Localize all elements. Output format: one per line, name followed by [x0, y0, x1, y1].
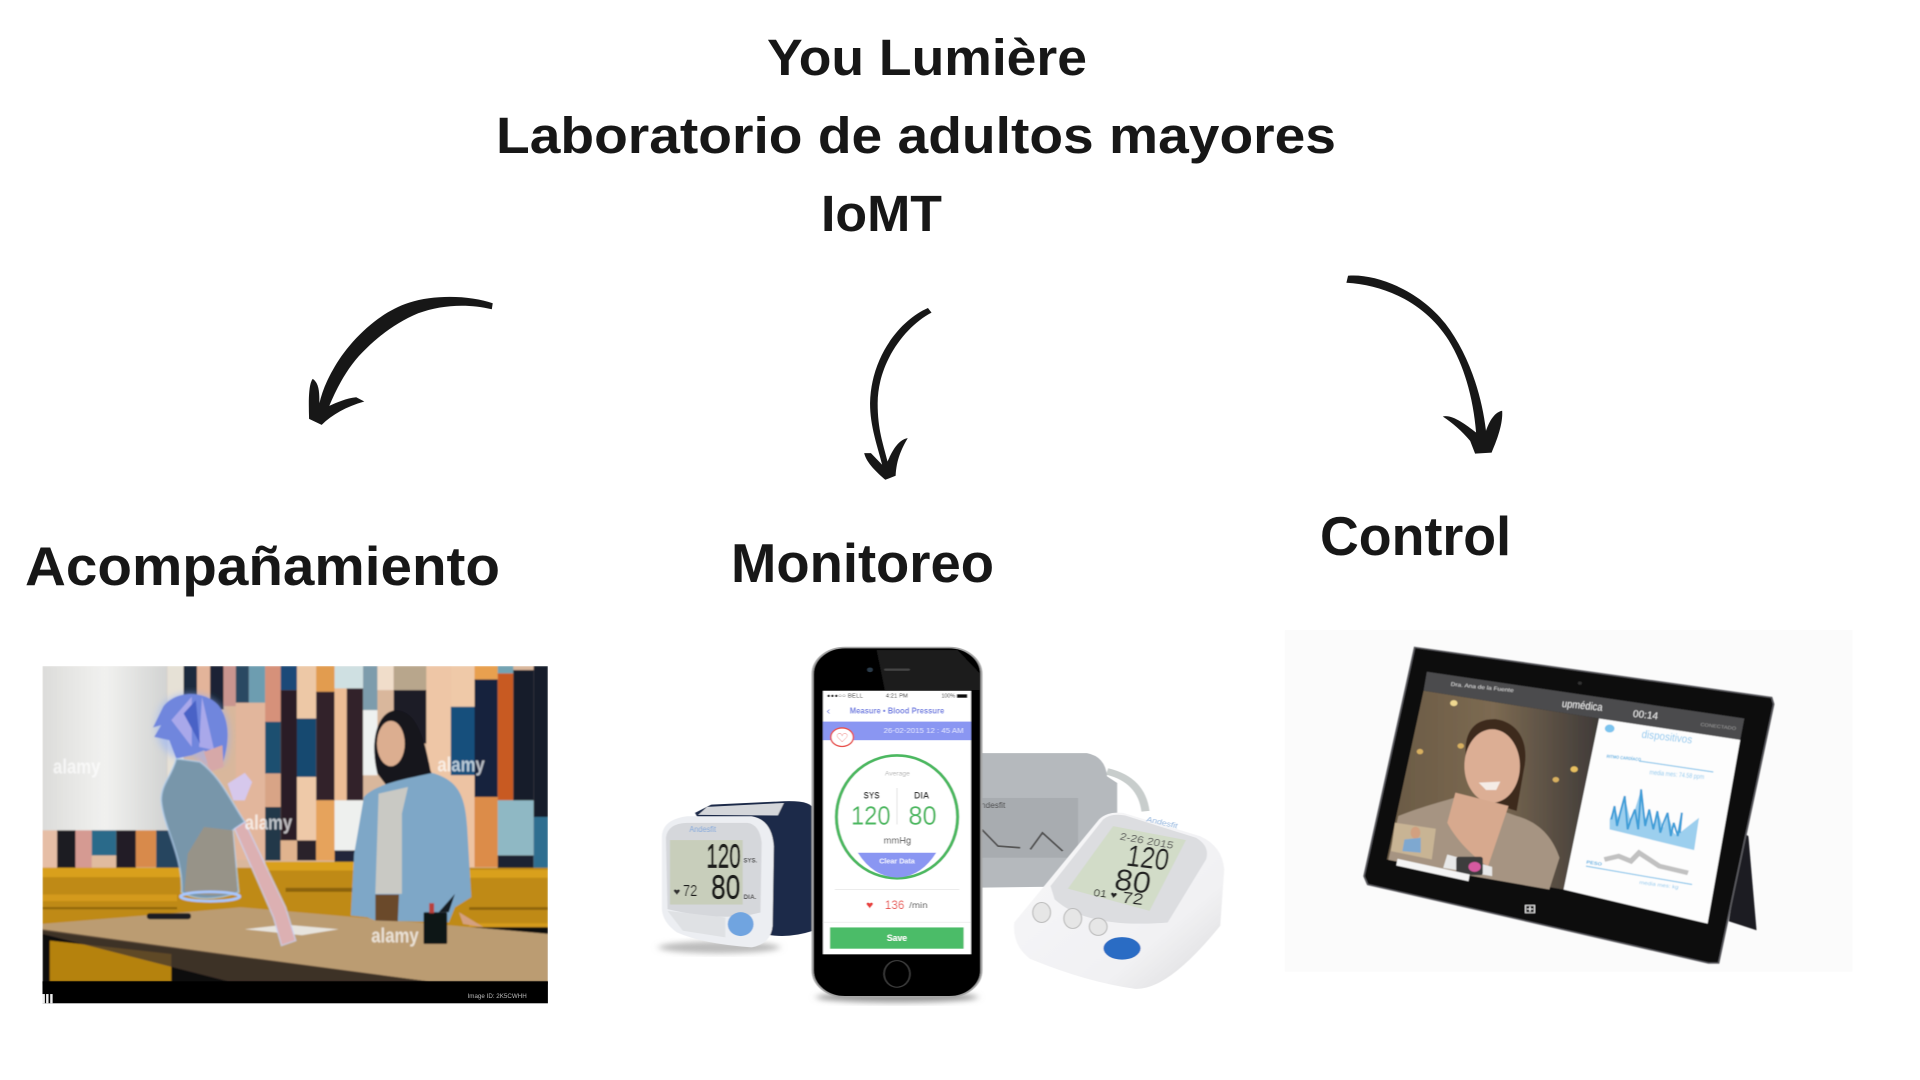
desktop monitor: 120	[1124, 840, 1172, 877]
photo: tablet telemedicine	[1285, 630, 1852, 972]
phone: /min	[909, 901, 928, 910]
dispositivos panel: dispositivos	[1641, 728, 1693, 746]
arm cuff	[981, 753, 1145, 888]
yellow wainscoting	[42, 862, 548, 938]
dispositivos panel: media mes: kg	[1639, 880, 1679, 891]
photo: tablet telemedicine: CONECTADO	[1700, 722, 1736, 732]
wrist monitor	[659, 801, 813, 953]
hologram avatar	[153, 693, 296, 946]
phone: DIA	[914, 791, 929, 801]
wrist monitor: SYS.	[744, 856, 757, 864]
photo: woman with hologram avatar	[42, 666, 548, 1003]
phone: Save	[887, 934, 907, 944]
video call	[1387, 691, 1599, 890]
desktop monitor	[1014, 813, 1224, 989]
panels below whiteboard	[42, 830, 181, 870]
watermark: alamy	[437, 753, 485, 776]
phone: ‹	[826, 706, 831, 717]
under table	[42, 927, 548, 984]
black footer bar: Image ID: 2K5CWHH	[468, 993, 527, 1000]
heading: Acompañamiento: Acompañamiento	[25, 535, 500, 597]
arrow: to Control	[1346, 276, 1502, 454]
wrist monitor: 80	[711, 869, 740, 906]
title: Laboratorio de adultos mayores	[496, 107, 1336, 164]
dispositivos panel: PESO	[1586, 860, 1602, 868]
desktop monitor: 80	[1112, 863, 1154, 901]
title: You Lumière	[767, 29, 1087, 86]
taskbar	[1387, 859, 1708, 933]
header bar	[1424, 672, 1744, 740]
title: IoMT	[821, 185, 942, 242]
photo: tablet telemedicine: ⊞	[1524, 902, 1537, 917]
photo: tablet telemedicine: Dra. Ana de la Fuente	[1450, 682, 1515, 694]
wrist monitor: 72	[683, 882, 697, 899]
phone: Average	[885, 769, 910, 778]
watermark: alamy	[245, 811, 292, 834]
phone: 100%	[941, 693, 956, 699]
phone: Measure • Blood Pressure	[850, 706, 944, 715]
wrist monitor: DIA.	[744, 893, 756, 901]
photo: blood pressure monitors and phone	[659, 648, 1224, 1002]
heading: Control: Control	[1320, 505, 1511, 567]
kickstand	[1729, 833, 1757, 930]
phone: mmHg	[884, 836, 911, 846]
watermark: alamy	[371, 923, 419, 947]
photo: tablet telemedicine: upmédica	[1561, 697, 1604, 714]
desktop monitor: 2-26 2015	[1119, 832, 1175, 851]
wrist monitor: ♥	[673, 887, 681, 898]
phone: 26-02-2015 12 : 45 AM	[884, 727, 964, 735]
photo: tablet telemedicine: 00:14	[1632, 709, 1659, 722]
arrow: to Acompañamiento	[309, 297, 493, 425]
wrist monitor: Andesfit	[689, 825, 716, 834]
dispositivos panel	[1564, 719, 1740, 924]
dispositivos panel: RITMO CARDÍACO	[1606, 752, 1642, 763]
phone	[813, 648, 981, 1002]
mosaic wall	[42, 666, 548, 873]
phone: 136	[885, 898, 904, 912]
phone: Clear Data	[879, 856, 915, 865]
watermark: alamy	[53, 755, 100, 778]
heading: Monitoreo: Monitoreo	[731, 532, 994, 594]
phone: ●●●○○ BELL	[827, 693, 864, 699]
woman	[351, 710, 483, 944]
arm cuff: ndesfit	[981, 801, 1006, 811]
phone: 120	[851, 802, 891, 831]
arrow: to Monitoreo	[864, 308, 932, 480]
desktop monitor: 01 ♥	[1093, 888, 1119, 901]
title	[496, 29, 1336, 242]
wrist monitor: 120	[706, 838, 741, 875]
whiteboard	[42, 666, 167, 830]
dispositivos panel: media mes: 74.58 ppm	[1649, 768, 1705, 781]
phone: ♥	[866, 899, 874, 911]
phone: 80	[908, 802, 937, 831]
desktop monitor: Andesfit	[1145, 815, 1180, 830]
black footer bar	[42, 981, 548, 1003]
tablet body	[1364, 647, 1774, 963]
phone: ♡	[836, 731, 849, 745]
watermark	[53, 753, 485, 947]
desktop monitor: 72	[1121, 888, 1145, 909]
phone: 4:21 PM	[886, 693, 908, 699]
phone: SYS	[863, 791, 880, 801]
table top	[42, 907, 548, 981]
